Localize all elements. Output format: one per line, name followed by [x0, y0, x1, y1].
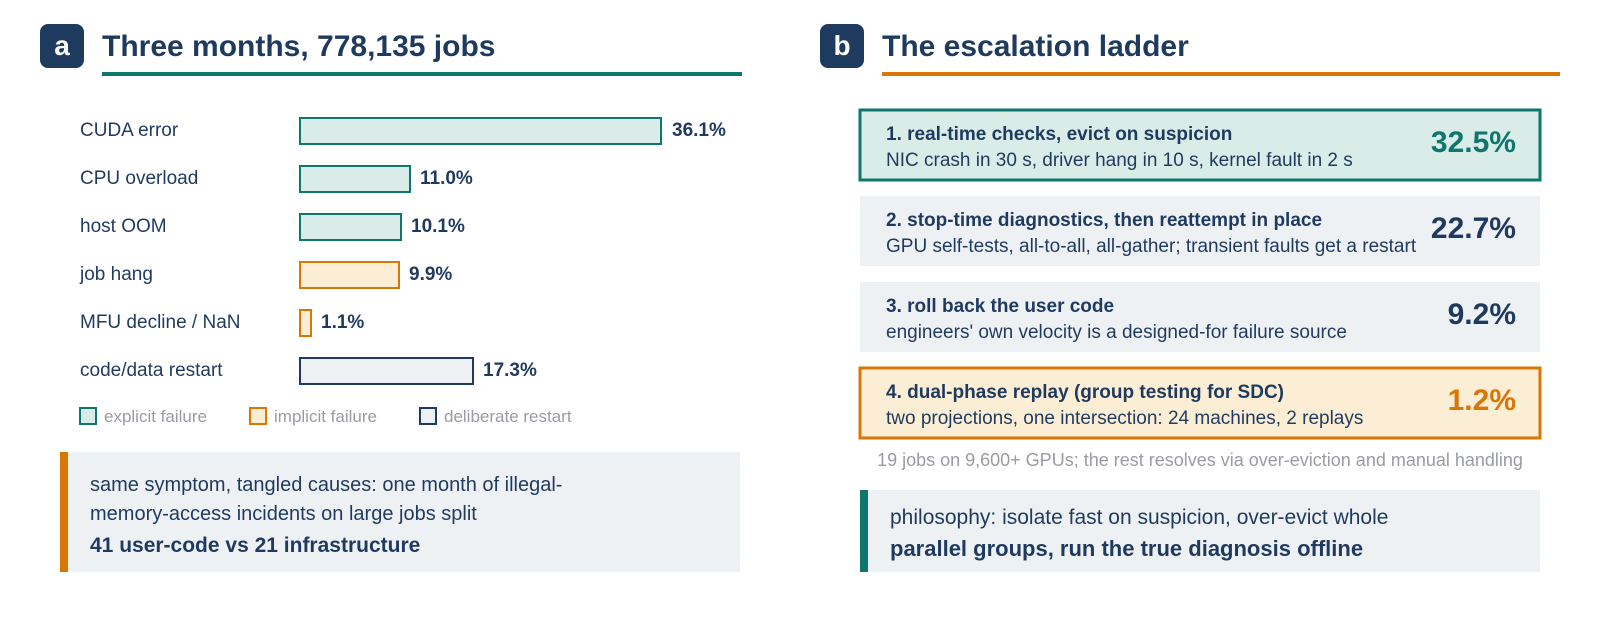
ladder step 2: [860, 196, 1540, 266]
bar row: code/data restart: [80, 358, 537, 384]
heading a underline: [102, 72, 742, 76]
ladder step 4: 4. dual-phase replay (group testing for SDC): [886, 382, 1284, 403]
callout: tangled causes: [60, 452, 740, 572]
note: remainder: 19 jobs on 9,600+ GPUs; the rest resolves via over-eviction and manual handling: [877, 450, 1523, 470]
bar row: MFU decline / NaN: MFU decline / NaN: [80, 312, 240, 333]
bar row: job hang: job hang: [79, 264, 153, 285]
ladder step 1: 32.5%: [1431, 126, 1516, 159]
ladder step 4: two projections, one intersection: 24 machines, 2 replays: [886, 408, 1363, 429]
callout: philosophy: parallel groups, run the true diagnosis offline: [890, 536, 1363, 561]
panel a: three months: [40, 24, 742, 572]
ladder step 1: [860, 110, 1540, 180]
bar row: CPU overload: CPU overload: [80, 168, 198, 189]
heading b underline: [882, 72, 1560, 76]
callout: tangled causes: 41 user-code vs 21 infrastructure: [90, 534, 420, 557]
ladder step 3: 3. roll back the user code: [886, 296, 1114, 317]
callout: tangled causes: same symptom, tangled causes: one month of illegal-: [90, 474, 562, 496]
bar row: CUDA error: CUDA error: [80, 120, 179, 141]
bar row: CPU overload: 11.0%: [420, 168, 473, 189]
legend: explicit failure: explicit failure: [104, 407, 207, 426]
ladder step 4: 1.2%: [1448, 384, 1516, 417]
bar row: job hang: [79, 262, 452, 288]
ladder step 4: [860, 368, 1540, 438]
heading b: The escalation ladder: [882, 30, 1189, 63]
ladder step 1: NIC crash in 30 s, driver hang in 10 s, kernel fault in 2 s: [886, 150, 1353, 171]
bar row: host OOM: host OOM: [80, 216, 167, 237]
ladder step 2: 22.7%: [1431, 212, 1516, 245]
panel b: escalation ladder: [820, 24, 1560, 572]
bar row: host OOM: 10.1%: [411, 216, 465, 237]
bar row: code/data restart: 17.3%: [483, 360, 537, 381]
legend: implicit failure: implicit failure: [274, 407, 377, 426]
callout: philosophy: philosophy: isolate fast on suspicion, over-evict whole: [890, 506, 1388, 529]
bar row: code/data restart: code/data restart: [80, 360, 223, 381]
bar row: host OOM: [80, 214, 465, 240]
callout: philosophy: [860, 490, 1540, 572]
ladder step 3: [860, 282, 1540, 352]
badge a: [40, 24, 84, 68]
ladder step 3: engineers' own velocity is a designed-for failure source: [886, 322, 1347, 343]
callout: tangled causes: memory-access incidents on large jobs split: [90, 503, 477, 525]
badge b: [820, 24, 864, 68]
bar row: job hang: 9.9%: [409, 264, 452, 285]
ladder step 3: 9.2%: [1448, 298, 1516, 331]
heading a: Three months, 778,135 jobs: [102, 30, 495, 63]
ladder step 2: GPU self-tests, all-to-all, all-gather; transient faults get a restart: [886, 236, 1417, 257]
ladder step 1: 1. real-time checks, evict on suspicion: [886, 124, 1232, 145]
bar chart: failure shares: [79, 118, 726, 384]
bar row: CUDA error: [80, 118, 726, 144]
bar row: MFU decline / NaN: [80, 310, 364, 336]
ladder step 2: 2. stop-time diagnostics, then reattempt in place: [886, 210, 1322, 231]
bar row: MFU decline / NaN: 1.1%: [321, 312, 364, 333]
badge a: a: [54, 30, 70, 61]
legend: deliberate restart: deliberate restart: [444, 407, 572, 426]
bar row: CUDA error: 36.1%: [672, 120, 726, 141]
badge b: b: [833, 30, 851, 61]
legend: [80, 407, 572, 426]
bar row: CPU overload: [80, 166, 473, 192]
